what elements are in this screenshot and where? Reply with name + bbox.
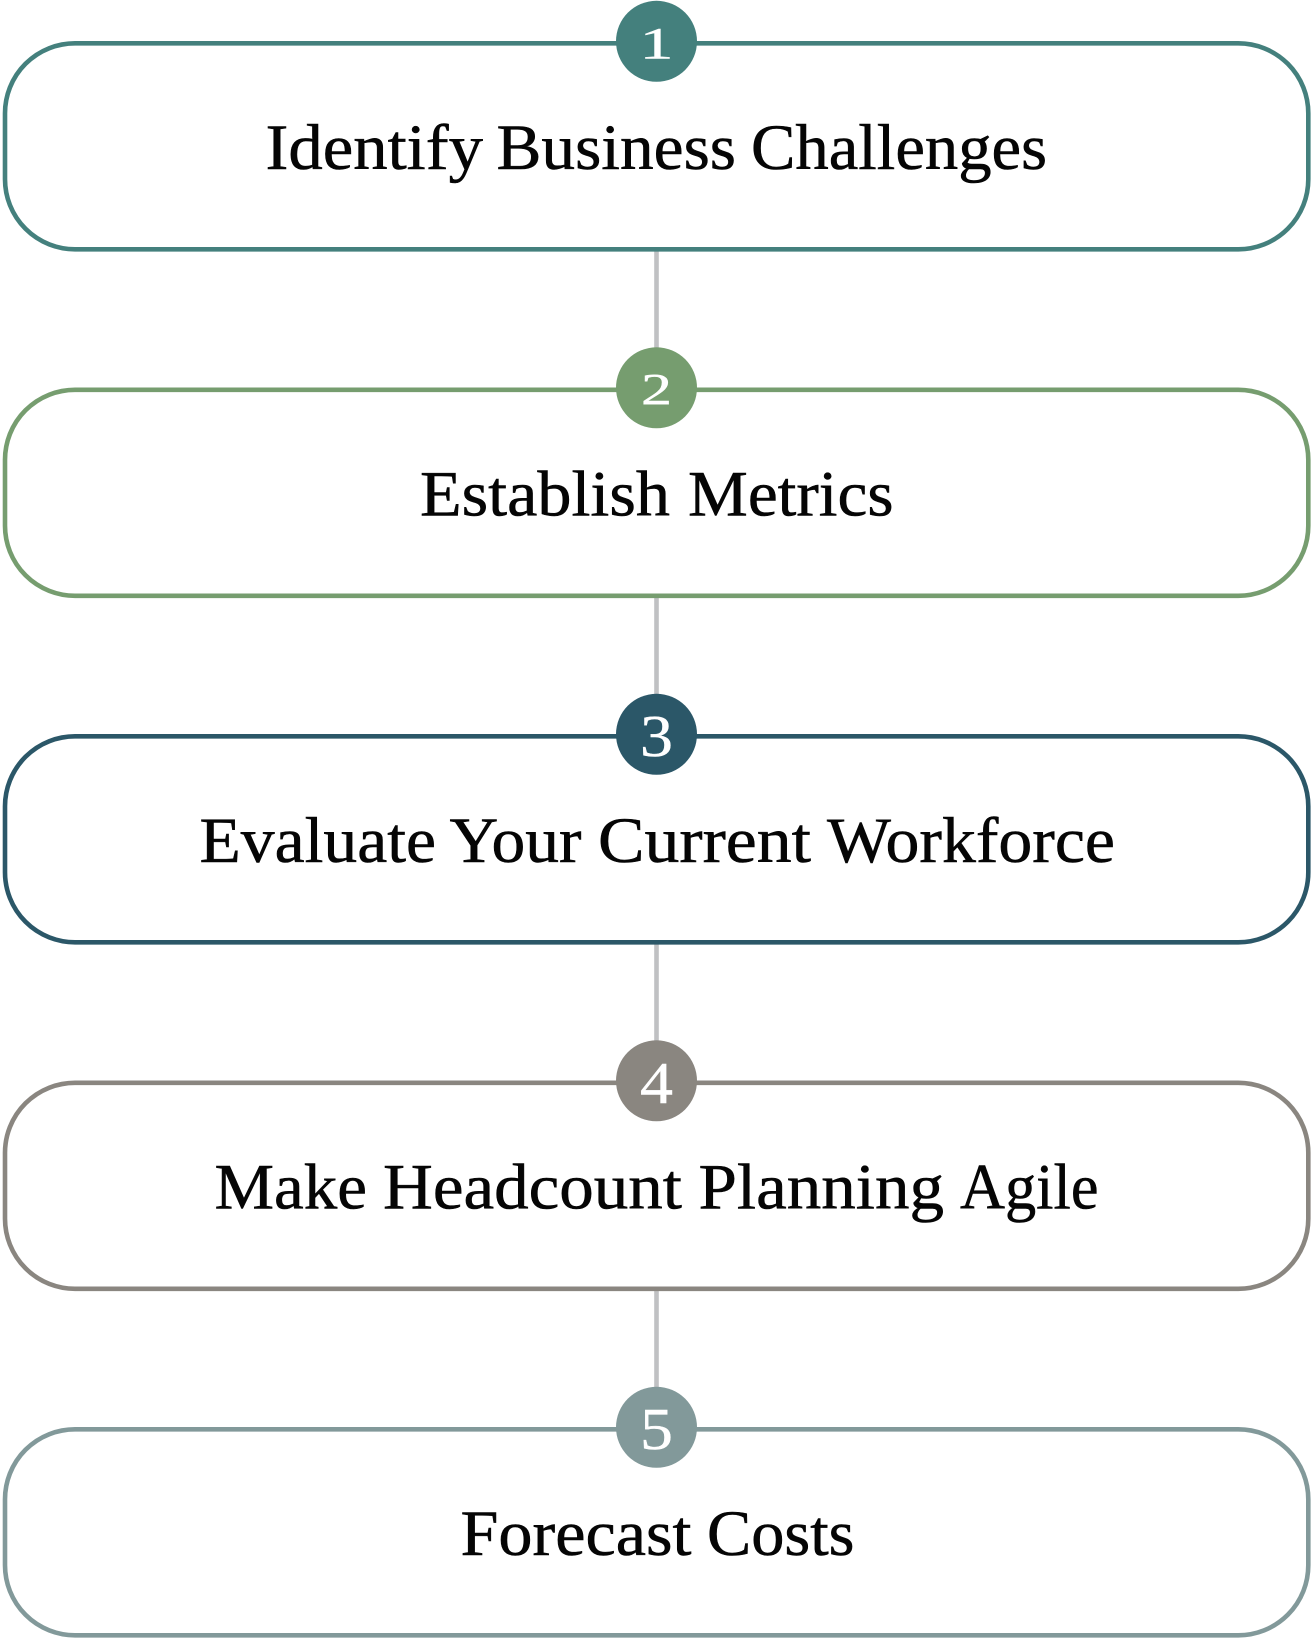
heading: step 1: Business <box>496 112 736 184</box>
connector: step 1 to 2 <box>654 249 659 349</box>
heading: step 4: Planning <box>698 1152 944 1224</box>
badge: number 2: 2 <box>641 365 672 414</box>
badge: number 3 <box>616 694 697 775</box>
heading: step 4: Agile <box>960 1152 1098 1224</box>
panel: step 2 outline <box>5 390 1308 596</box>
badge: number 5 <box>616 1387 697 1468</box>
badge: number 4: 4 <box>640 1050 673 1116</box>
step 1: Identify Business Challenges <box>5 1 1308 249</box>
heading: step 3: Your <box>450 805 582 877</box>
heading: step 5: Costs <box>707 1498 854 1570</box>
heading: step 4: Headcount <box>383 1152 682 1224</box>
badge: number 1: 1 <box>640 19 674 68</box>
badge: number 3: 3 <box>640 703 673 769</box>
heading: step 3: Evaluate <box>200 805 436 877</box>
heading: step 1: Challenges <box>751 112 1047 184</box>
step 2: Establish Metrics <box>5 347 1308 596</box>
connector: step 4 to 5 <box>654 1288 659 1388</box>
panel: step 4 outline <box>5 1083 1308 1289</box>
badge: number 1 <box>616 1 697 82</box>
connector: step 3 to 4 <box>654 942 659 1042</box>
heading: step 3: Workforce <box>827 805 1115 877</box>
heading: step 2: Metrics <box>688 458 894 530</box>
heading: step 2: Establish <box>420 458 670 530</box>
heading: step 5: Forecast <box>460 1498 692 1570</box>
step 5: Forecast Costs <box>5 1387 1308 1635</box>
badge: number 4 <box>616 1040 697 1121</box>
step 4: Make Headcount Planning Agile <box>5 1040 1308 1289</box>
badge: number 5: 5 <box>640 1396 673 1462</box>
panel: step 3 outline <box>5 736 1308 942</box>
heading: step 3: Current <box>598 805 811 877</box>
heading: step 4: Make <box>214 1152 367 1224</box>
heading: step 1: Identify <box>266 112 484 184</box>
badge: number 2 <box>616 347 697 428</box>
panel: step 5 outline <box>5 1429 1308 1635</box>
step 3: Evaluate Your Current Workforce <box>5 694 1308 942</box>
connector: step 2 to 3 <box>654 596 659 696</box>
panel: step 1 outline <box>5 43 1308 249</box>
